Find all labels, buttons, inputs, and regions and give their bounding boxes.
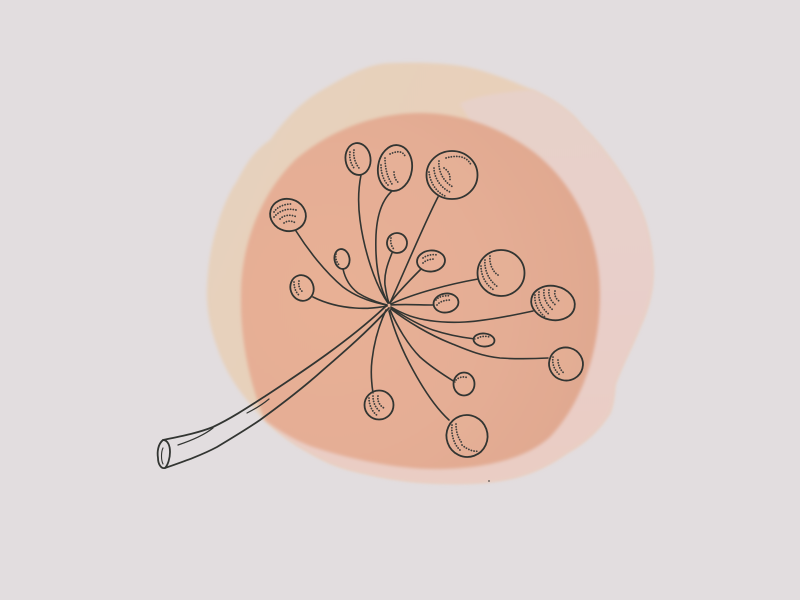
watercolor wash: inner circle: [241, 113, 600, 469]
seed stippling: [274, 150, 565, 451]
stem: [158, 306, 389, 468]
stalks: [296, 175, 548, 420]
watercolor wash: outer blob: [207, 63, 653, 483]
seed pods: [266, 141, 587, 463]
speck: [488, 480, 490, 482]
plant line drawing: [158, 141, 587, 468]
pod outlines: [266, 141, 587, 463]
watercolor wash: pink overlap: [265, 90, 653, 483]
